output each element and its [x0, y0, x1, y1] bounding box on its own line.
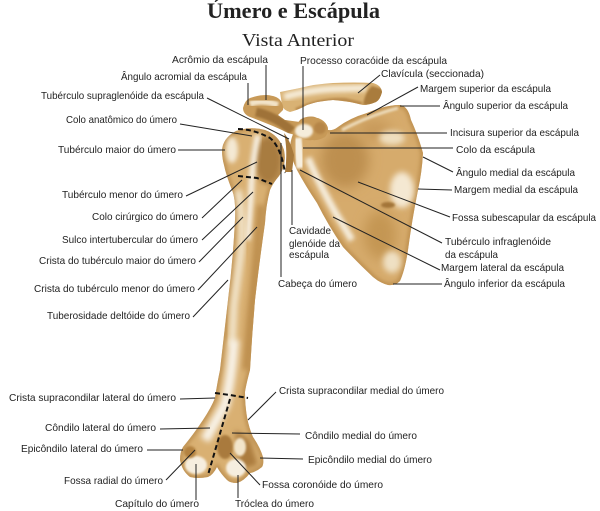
upper right labels: Ângulo medial da escápula	[456, 166, 575, 179]
upper right labels: Ângulo inferior da escápula	[444, 277, 565, 290]
upper left labels: Ângulo acromial da escápula	[121, 70, 247, 83]
upper right labels: Cavidade	[289, 225, 331, 237]
upper left labels: Sulco intertubercular do úmero	[62, 234, 198, 246]
upper left labels: Colo anatômico do úmero	[66, 114, 177, 126]
lower labels: Crista supracondilar medial do úmero	[279, 385, 444, 397]
upper left labels: Tubérculo supraglenóide da escápula	[41, 90, 204, 102]
upper left labels: Tuberosidade deltóide do úmero	[47, 310, 190, 322]
upper right labels	[278, 55, 596, 290]
lower labels: Fossa radial do úmero	[64, 475, 163, 487]
upper left labels: Crista do tubérculo menor do úmero	[34, 283, 195, 295]
subtitle: Vista Anterior	[242, 30, 354, 50]
upper right labels: glenóide da	[289, 238, 340, 250]
upper left labels: Acrômio da escápula	[172, 54, 268, 66]
clavicle	[280, 82, 386, 112]
upper right labels: Margem lateral da escápula	[441, 262, 564, 274]
lower labels: Côndilo medial do úmero	[305, 430, 417, 442]
humerus	[180, 128, 285, 483]
upper right labels: escápula	[289, 249, 329, 261]
upper right labels: Cabeça do úmero	[278, 278, 357, 290]
upper left labels: Colo cirúrgico do úmero	[92, 211, 198, 223]
upper right labels: Processo coracóide da escápula	[300, 55, 447, 67]
lower labels	[9, 385, 444, 510]
lower labels: Epicôndilo lateral do úmero	[21, 443, 143, 455]
upper left labels: Tubérculo menor do úmero	[62, 189, 183, 201]
joint capsule dashed lines	[208, 129, 285, 475]
lower labels: Capítulo do úmero	[115, 498, 199, 510]
upper left labels: Crista do tubérculo maior do úmero	[39, 255, 196, 267]
lower labels: Côndilo lateral do úmero	[45, 422, 156, 434]
upper right labels: da escápula	[445, 249, 498, 261]
upper right labels: Tubérculo infraglenóide	[445, 236, 551, 248]
lower labels: Tróclea do úmero	[235, 498, 314, 510]
upper right labels: Ângulo superior da escápula	[443, 99, 568, 112]
upper left labels	[34, 54, 289, 322]
lower labels: Epicôndilo medial do úmero	[308, 454, 432, 466]
scapula	[290, 105, 423, 285]
acromion and coracoid process	[243, 95, 328, 140]
upper right labels: Incisura superior da escápula	[450, 127, 579, 139]
upper left labels: Tubérculo maior do úmero	[58, 144, 176, 156]
lower labels: Crista supracondilar lateral do úmero	[9, 392, 176, 404]
upper right labels: Colo da escápula	[456, 144, 535, 156]
lower labels: Fossa coronóide do úmero	[262, 479, 383, 491]
glenoid cavity	[284, 133, 294, 172]
upper right labels: Margem superior da escápula	[420, 83, 551, 95]
upper right labels: Clavícula (seccionada)	[381, 68, 484, 80]
upper right labels: Margem medial da escápula	[454, 184, 578, 196]
